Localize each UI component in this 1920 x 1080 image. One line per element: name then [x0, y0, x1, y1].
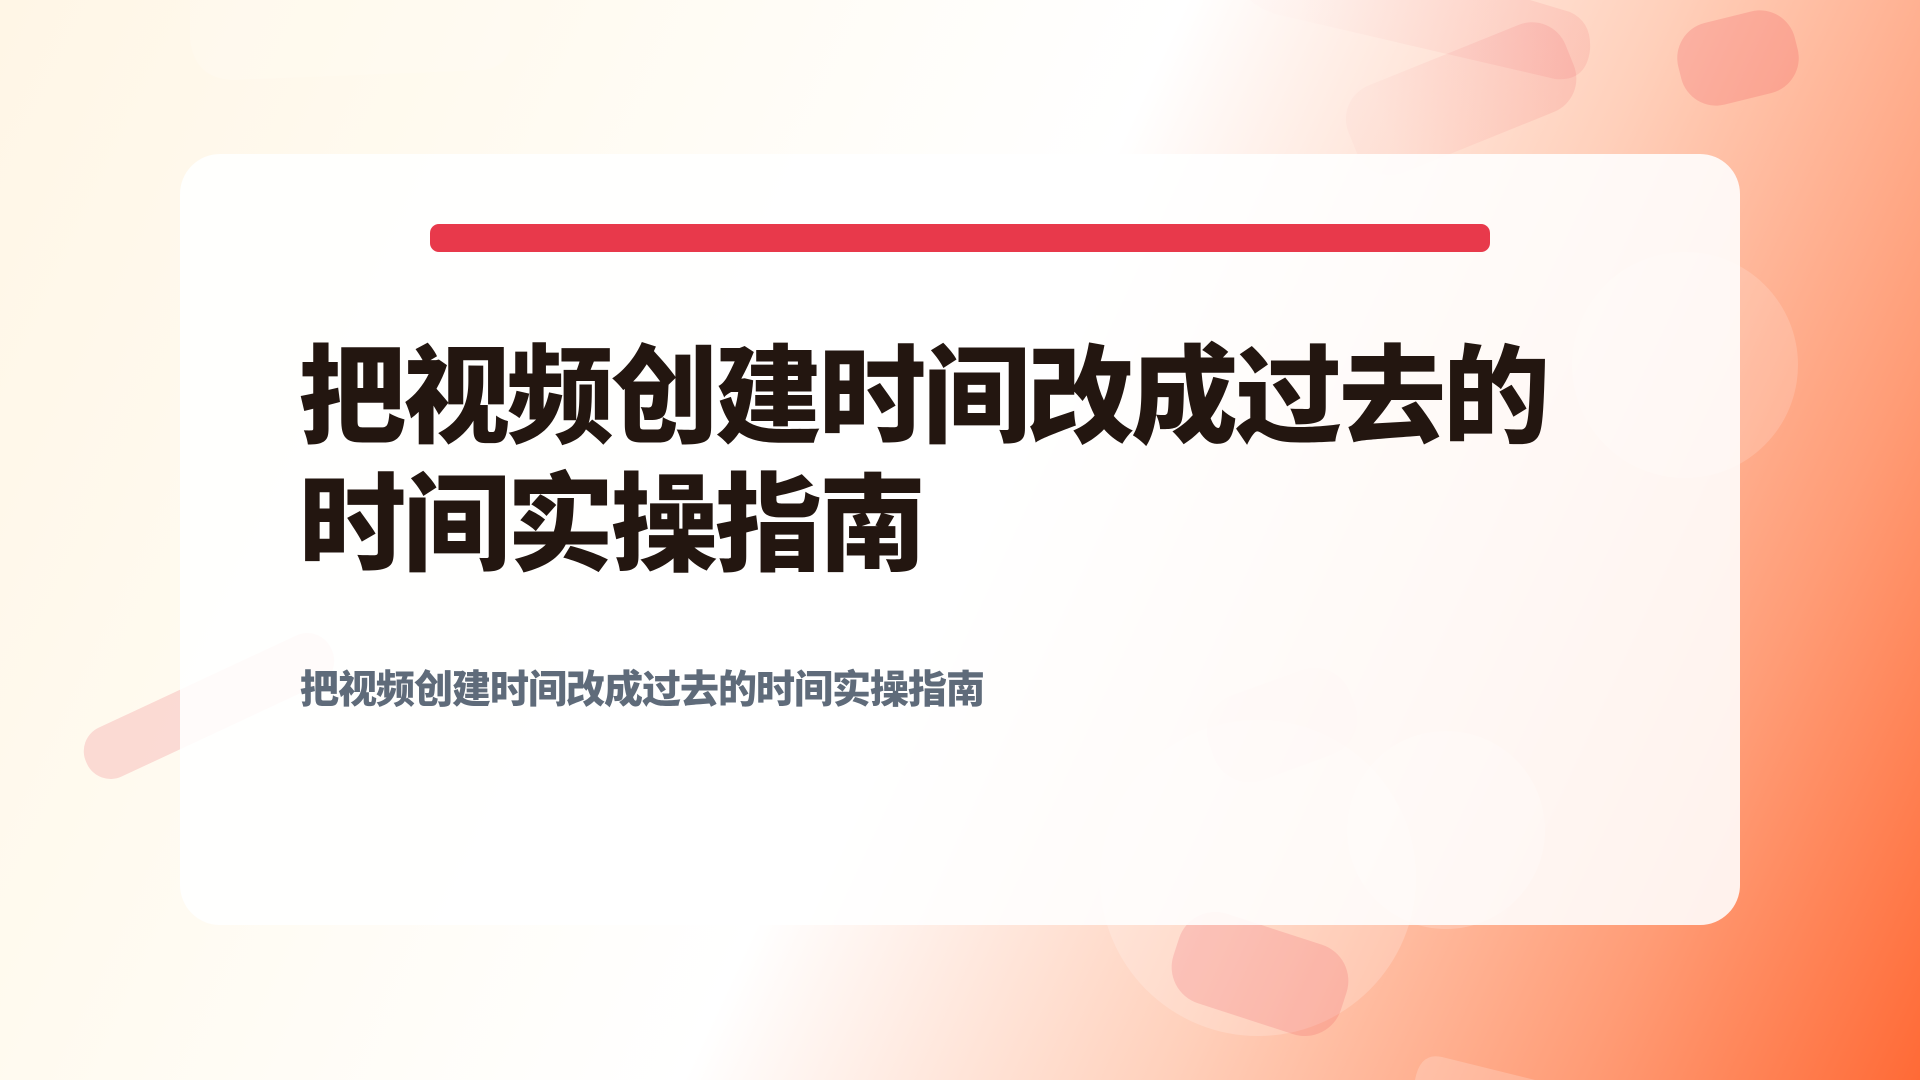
shape: block at bottom edge: [1415, 1056, 1535, 1080]
title: 把视频创建时间改成过去的: [299, 337, 1547, 457]
shape: pale pill at left: [75, 624, 343, 788]
shape: pale block behind panel right: [1196, 657, 1368, 793]
shape: long faded bar at top: [1250, 0, 1590, 79]
title: 时间实操指南: [299, 465, 923, 585]
shape: slanted faded block at top: [1335, 11, 1587, 186]
circle: bottom large: [1100, 720, 1416, 1036]
circle: upper right: [1572, 252, 1798, 478]
shape: faint block top left: [190, 0, 510, 80]
panel: title card: [180, 154, 1740, 925]
shape: small pink block top right: [1670, 3, 1806, 113]
shape: pink block at bottom: [1162, 902, 1358, 1046]
title: [299, 337, 1547, 585]
circle: inside panel: [1347, 731, 1545, 929]
accent bar: [430, 224, 1490, 252]
subtitle: 把视频创建时间改成过去的时间实操指南: [300, 669, 984, 712]
